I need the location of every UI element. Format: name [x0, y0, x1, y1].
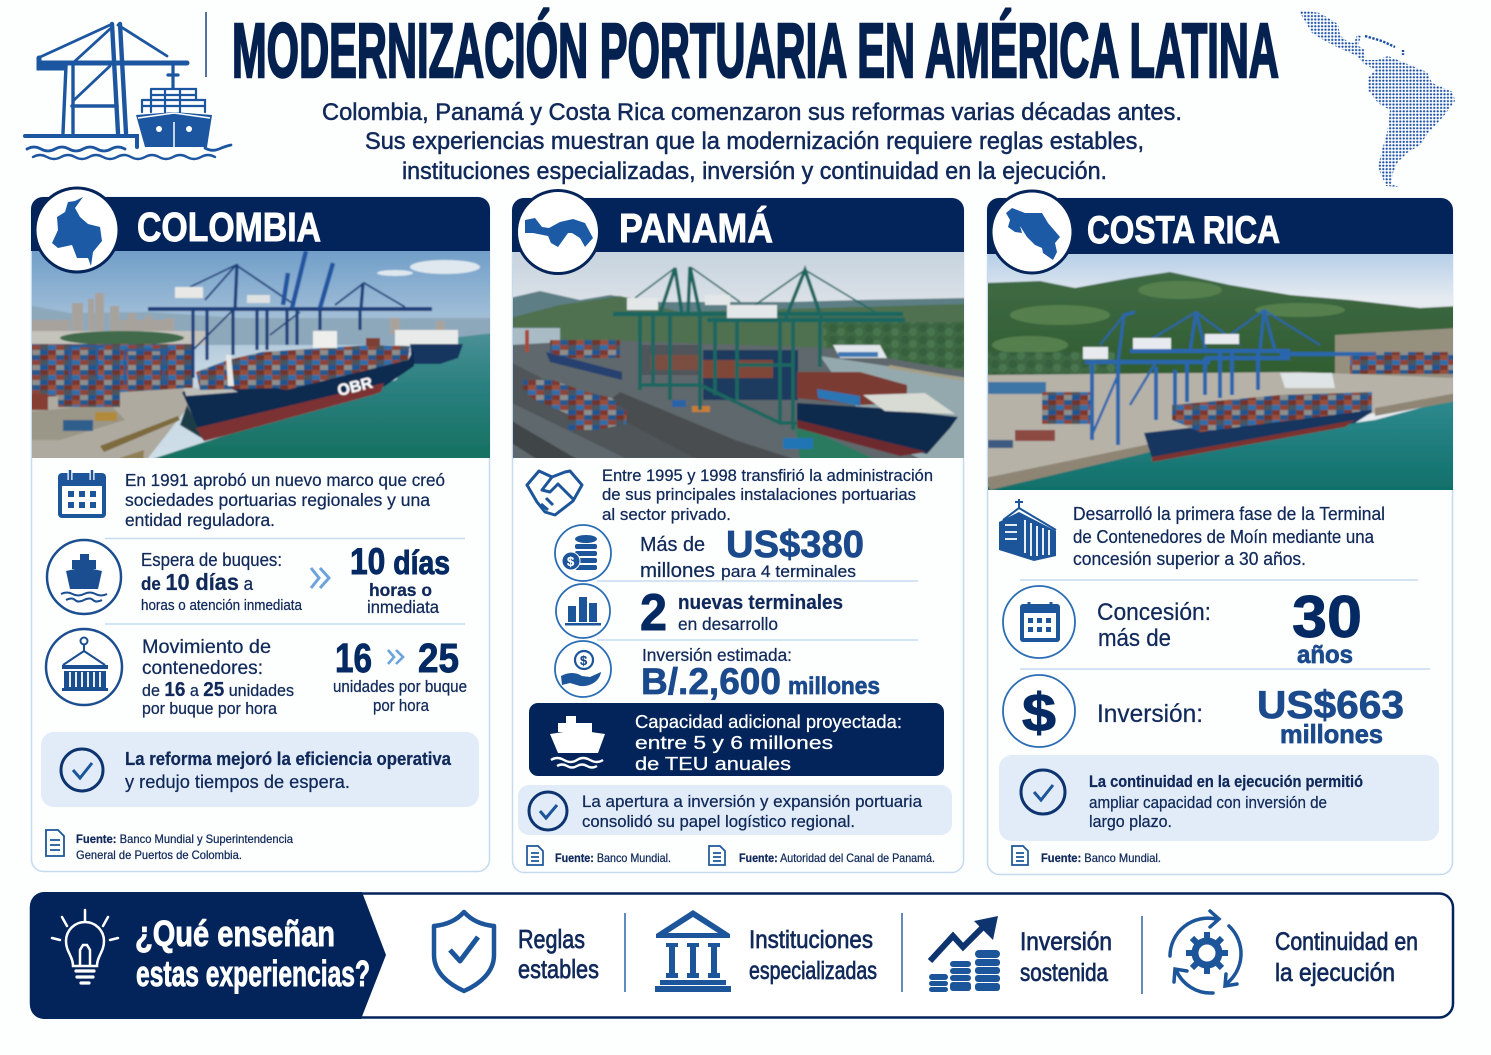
icon: hand holding coin	[555, 641, 611, 697]
item: Reglas estables	[434, 912, 599, 991]
stat: US$663 millones: US$663	[1257, 684, 1404, 727]
arrow	[311, 568, 329, 588]
icon: handshake	[527, 471, 582, 515]
heading block	[30, 892, 386, 1019]
callout: Costa Rica: La continuidad en la ejecución permitió	[1089, 772, 1363, 791]
icon: coins: $	[567, 554, 575, 569]
callout: Colombia: La reforma mejoró la eficiencia operativa	[125, 749, 452, 769]
source: Costa Rica	[1012, 846, 1161, 865]
stat: 2 nuevas terminales: en desarrollo	[678, 614, 778, 634]
stat: 30 años: 30	[1292, 584, 1362, 650]
stat: 30 años: más de	[1098, 625, 1171, 652]
ship	[1144, 407, 1372, 461]
icon: Costa Rica map badge	[991, 191, 1073, 273]
source: Colombia	[46, 830, 293, 862]
source: Colombia: Fuente: Banco Mundial y Superintendencia	[76, 832, 293, 846]
panel: lessons bar	[30, 892, 1453, 1019]
heading: Panamá: PANAMÁ	[619, 205, 773, 251]
heading: Costa Rica: COSTA RICA	[1087, 209, 1280, 252]
stat: B/.2,600 millones: Inversión estimada:	[642, 645, 792, 665]
icon: check	[1021, 770, 1065, 814]
cranes	[1085, 310, 1375, 445]
callout: Panamá: consolidó su papel logístico regional.	[582, 813, 855, 831]
stat: B/.2,600 millones	[555, 641, 880, 702]
photo: port of Costa Rica	[985, 251, 1457, 493]
icon: hand holding coin: $	[580, 653, 588, 668]
card body	[512, 198, 964, 872]
heading block: ¿Qué enseñan	[135, 913, 335, 954]
stat: 30 años	[1003, 584, 1362, 669]
item: Continuidad en la ejecución: la ejecución	[1275, 959, 1395, 987]
stat: US$380 millones: millones	[640, 560, 715, 582]
cranes	[148, 251, 432, 378]
text	[602, 467, 933, 524]
icon: light bulb	[52, 910, 118, 983]
stat: B/.2,600 millones: millones	[788, 673, 880, 700]
text: Entre 1995 y 1998 transfirió la administración	[602, 467, 933, 485]
stat: US$663 millones: Inversión:	[1097, 700, 1203, 728]
icon: dollar	[1003, 675, 1075, 747]
stat: US$663 millones	[1003, 675, 1404, 749]
source: Panamá: Fuente: Autoridad del Canal de Panamá.	[739, 851, 935, 865]
icon: coins	[555, 525, 611, 581]
header divider	[205, 12, 207, 77]
source: Panamá	[527, 846, 935, 865]
stat: US$380 millones: US$380	[726, 524, 864, 566]
text: En 1991 aprobó un nuevo marco que creó	[125, 470, 445, 490]
heading: Colombia: COLOMBIA	[137, 204, 321, 250]
item: Inversión sostenida: Inversión	[1020, 928, 1112, 956]
value: 10 días	[350, 541, 450, 582]
icon: hanging container	[999, 499, 1056, 561]
main ship	[182, 349, 414, 440]
icon: calendar	[1003, 586, 1075, 658]
stat: US$663 millones: millones	[1280, 719, 1383, 749]
icon: gear cycle	[1170, 911, 1241, 993]
subtitle	[322, 99, 1182, 185]
text	[142, 637, 271, 679]
icon: bar chart	[556, 584, 610, 638]
photo: port of Colombia	[28, 248, 494, 462]
text: concesión superior a 30 años.	[1073, 548, 1306, 569]
item: Continuidad en la ejecución	[1170, 911, 1418, 993]
subtitle: instituciones especializadas, inversión y continuidad en la ejecución.	[402, 158, 1107, 185]
callout: Costa Rica: ampliar capacidad con inversión de	[1089, 793, 1327, 812]
stat: 30 años: Concesión:	[1097, 599, 1211, 626]
subtitle: Sus experiencias muestran que la modernización requiere reglas estables,	[365, 128, 1144, 155]
callout: Panamá: La apertura a inversión y expansión portuaria	[582, 793, 923, 811]
banner: projected capacity: entre 5 y 6 millones	[635, 733, 833, 753]
item: Instituciones especializadas: Instituciones	[749, 926, 873, 954]
item: Reglas estables: Reglas	[518, 924, 585, 954]
photo: port of Panamá	[510, 249, 968, 461]
icon: dollar: $	[1022, 683, 1056, 743]
panel: Costa Rica	[985, 191, 1457, 874]
stat: ship waiting time: horas o atención inmediata	[141, 598, 303, 614]
source: Panamá: Fuente: Banco Mundial.	[555, 851, 671, 865]
banner: projected capacity	[529, 703, 944, 776]
icon: ship	[47, 540, 121, 614]
banner: projected capacity: Capacidad adicional proyectada:	[635, 712, 902, 732]
icon: crane and container ship logo	[25, 24, 231, 159]
icon: document	[1012, 846, 1028, 865]
item: Instituciones especializadas	[655, 910, 877, 992]
icon: Colombia map badge	[35, 188, 119, 272]
callout: Costa Rica: largo plazo.	[1089, 812, 1172, 831]
subtitle: Colombia, Panamá y Costa Rica comenzaron sus reformas varias décadas antes.	[322, 99, 1182, 126]
stat: 2 nuevas terminales: 2	[640, 584, 667, 642]
callout: Panamá	[518, 785, 952, 835]
text: al sector privado.	[602, 506, 731, 524]
stat: container movement: unidades por buque	[333, 678, 467, 696]
stat: 2 nuevas terminales: nuevas terminales	[678, 592, 843, 614]
stat: container movement: por buque por hora	[142, 699, 278, 718]
card body	[988, 198, 1452, 874]
item: Inversión sostenida	[929, 916, 1112, 992]
stat: 30 años: años	[1297, 641, 1353, 669]
icon: container	[46, 629, 122, 705]
icon: document	[709, 846, 725, 865]
text: entidad reguladora.	[125, 510, 275, 530]
callout: Colombia: y redujo tiempos de espera.	[125, 772, 350, 792]
cranes	[613, 267, 905, 430]
text: de Contenedores de Moín mediante una	[1073, 526, 1375, 547]
stat: container movement	[46, 629, 467, 718]
stat: US$380 millones: Más de	[640, 534, 705, 556]
icon: check	[529, 792, 567, 830]
icon: calendar	[58, 470, 106, 518]
heading block: estas experiencias?	[136, 953, 370, 994]
item: Reglas estables: estables	[518, 954, 599, 984]
text	[1073, 503, 1385, 569]
item: Inversión sostenida: sostenida	[1020, 959, 1108, 987]
text: Movimiento de	[142, 637, 271, 658]
icon: temple	[655, 910, 731, 992]
card body	[32, 198, 490, 872]
text: contenedores:	[142, 658, 263, 679]
text	[125, 470, 445, 530]
icon: document	[527, 846, 543, 865]
stat: ship waiting time: de 10 días a	[141, 569, 254, 595]
value: 16	[335, 635, 372, 681]
icon: growth chart and coins	[929, 916, 1000, 992]
header bar	[987, 198, 1453, 254]
panel: Panamá	[510, 190, 968, 872]
photo: port of Colombia: OBR	[336, 375, 375, 400]
stat: US$380 millones	[555, 524, 864, 582]
icon: shield check	[434, 912, 494, 991]
callout: Costa Rica	[999, 755, 1439, 841]
text: Desarrolló la primera fase de la Terminal	[1073, 503, 1385, 524]
text: Espera de buques:	[141, 550, 282, 570]
stat: B/.2,600 millones: B/.2,600	[641, 661, 781, 702]
stat: 2 nuevas terminales	[556, 584, 843, 642]
ship	[797, 403, 958, 454]
icon: ship white	[550, 716, 605, 768]
stat: container movement: por hora	[373, 697, 430, 715]
banner: projected capacity: de TEU anuales	[635, 754, 791, 774]
source: Colombia: General de Puertos de Colombia.	[76, 848, 242, 862]
icon: check	[61, 749, 103, 791]
second ship	[395, 330, 458, 350]
icon: document	[46, 830, 64, 856]
stat: US$380 millones: para 4 terminales	[721, 563, 856, 581]
intro: Costa Rica	[999, 499, 1385, 569]
stat: container movement: de 16 a 25 unidades	[142, 679, 294, 701]
header bar	[31, 197, 490, 251]
text: sociedades portuarias regionales y una	[125, 490, 430, 510]
header bar	[512, 198, 964, 252]
icon: Panamá map badge	[516, 190, 600, 274]
stat: ship waiting time: inmediata	[367, 597, 439, 617]
item: Instituciones especializadas: especializadas	[749, 957, 877, 985]
source: Costa Rica: Fuente: Banco Mundial.	[1041, 851, 1161, 865]
callout: Colombia	[41, 732, 479, 807]
icon: dotted map of Latin America	[1299, 10, 1455, 187]
stat: ship waiting time: horas o	[369, 580, 432, 600]
intro: Panamá	[527, 467, 933, 524]
item: Continuidad en la ejecución: Continuidad en	[1275, 928, 1418, 956]
intro: Colombia	[58, 470, 445, 530]
panel: Colombia	[28, 188, 494, 872]
stat: container movement: 25	[418, 635, 459, 681]
stat: ship waiting time	[47, 540, 450, 617]
text: de sus principales instalaciones portuarias	[602, 486, 916, 504]
